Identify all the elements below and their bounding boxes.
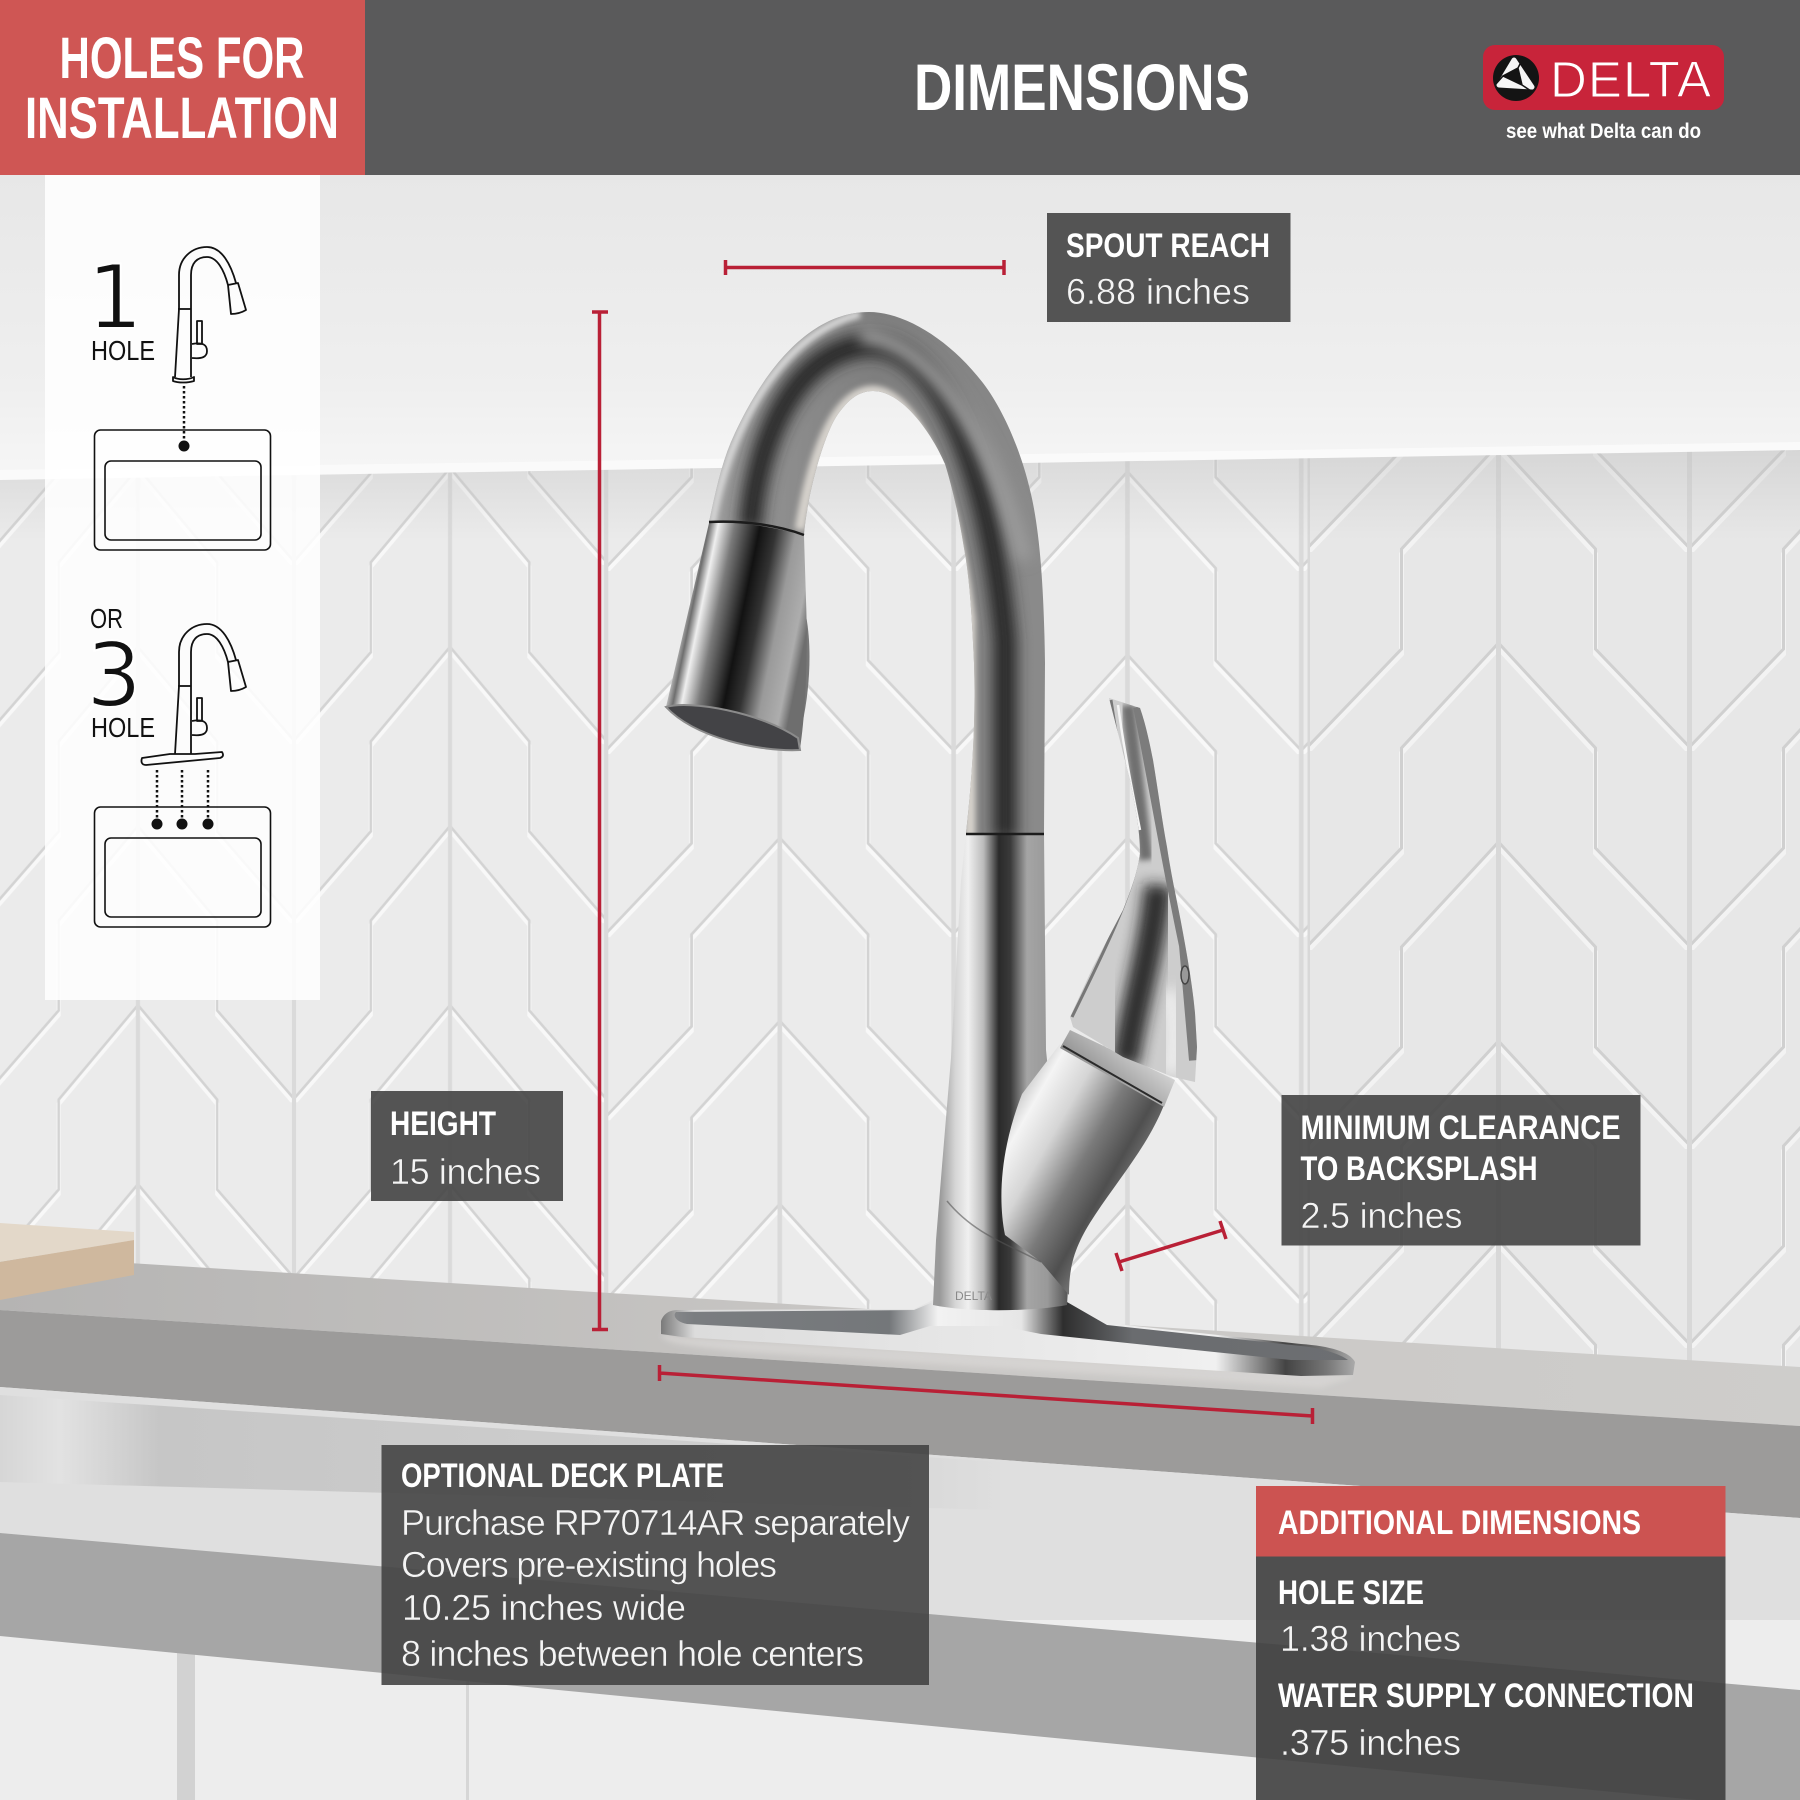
water supply value: .375 inches [1280,1722,1461,1763]
callout: optional deck plate: 8 inches between hole centers [401,1633,864,1674]
body background [1256,1556,1726,1800]
icon: sink with one hole [94,430,270,550]
panel: holes for installation diagrams [45,175,320,1000]
callout: optional deck plate: OPTIONAL DECK PLATE [401,1457,724,1495]
cabinet door gap, left [177,1640,195,1800]
numeral 3: 3 [86,624,142,727]
callout: minimum clearance: MINIMUM CLEARANCE [1300,1109,1620,1147]
handle neck [1001,1044,1164,1295]
cabinet lip [0,442,1800,480]
heading: holes for installation: INSTALLATION [25,86,339,151]
label: hole: HOLE [91,335,155,366]
neck ring groove [1063,1046,1162,1103]
cabinet door gap, center [466,1670,469,1800]
dimension line: spout reach [726,260,1004,275]
lower counter band [0,1533,1800,1800]
base seam [947,1201,1041,1262]
deck plate [661,1300,1355,1388]
heading: holes for installation: HOLES FOR [60,26,304,91]
callout: height [371,1091,563,1201]
sink interior metal [0,1395,1000,1510]
callout: height: HEIGHT [390,1105,496,1143]
callout: optional deck plate [382,1445,929,1685]
dotted guides, three holes [157,770,208,818]
numeral 1: 1 [87,246,143,349]
countertop front edge [0,1310,1800,1518]
callout: spout reach [1047,213,1290,322]
pull-down spray head [666,523,807,749]
upper cabinet [0,175,1800,478]
hole size value: 1.38 inches [1280,1618,1461,1659]
callout: spout reach: 6.88 inches [1066,271,1250,312]
lower cabinets [0,1620,1800,1800]
logo: Delta: DELTA [1550,51,1711,108]
backsplash tiles, right section [1308,440,1800,1380]
callout: height: 15 inches [390,1151,541,1192]
title: dimensions: DIMENSIONS [914,50,1250,124]
icon: sink with three holes [94,807,270,927]
faucet stem [933,833,1069,1310]
logo: Delta [1483,45,1724,143]
callout: optional deck plate: Covers pre-existing holes [401,1544,777,1585]
hole size label: HOLE SIZE [1278,1574,1424,1612]
spray head back bump [802,600,810,725]
callout: spout reach: SPOUT REACH [1066,227,1270,265]
red band [0,0,365,175]
callout: optional deck plate: 10.25 inches wide [402,1587,686,1628]
shadow under cabinet [0,440,1800,540]
callout: optional deck plate: Purchase RP70714AR separately [401,1502,910,1543]
gray band [365,0,1800,175]
countertop surface [0,1255,1800,1426]
neck ring [1060,1030,1175,1107]
label: or: OR [90,603,123,634]
label: hole, three-hole option: HOLE [91,712,155,743]
logo: Delta: see what Delta can do [1506,120,1701,143]
spout gooseneck [709,312,1045,833]
cutting board front [0,1240,134,1300]
dimension line: backsplash clearance [1116,1221,1226,1271]
callout: minimum clearance: TO BACKSPLASH [1300,1150,1538,1188]
head collar seam [709,522,804,535]
red heading band [1256,1486,1726,1556]
icon: faucet outline, one hole [173,247,246,382]
heading: ADDITIONAL DIMENSIONS [1278,1504,1641,1542]
dimension line: height [592,312,608,1330]
heading: holes for installation [25,26,339,151]
base brand mark: DELTA [955,1289,992,1303]
dimension line: deck plate width [659,1365,1312,1424]
sink basin [0,1387,1800,1700]
lever handle [1070,698,1197,1082]
stem collar seam [966,833,1044,835]
icon: faucet outline with deck plate [141,624,246,765]
backsplash tiles, middle section [606,440,1308,1380]
panel: additional dimensions [1256,1486,1726,1800]
cutting board top [0,1223,134,1262]
lever set screw [1181,966,1189,984]
header bar [0,0,1800,175]
dotted guide, one hole [183,386,185,440]
water supply label: WATER SUPPLY CONNECTION [1278,1677,1694,1715]
spray face [666,705,800,750]
callout: minimum clearance [1282,1095,1640,1246]
backsplash tiles, left section [0,440,606,1380]
callout: minimum clearance: 2.5 inches [1300,1195,1462,1236]
translucent panel [45,175,320,1000]
faucet product illustration [661,300,1355,1388]
